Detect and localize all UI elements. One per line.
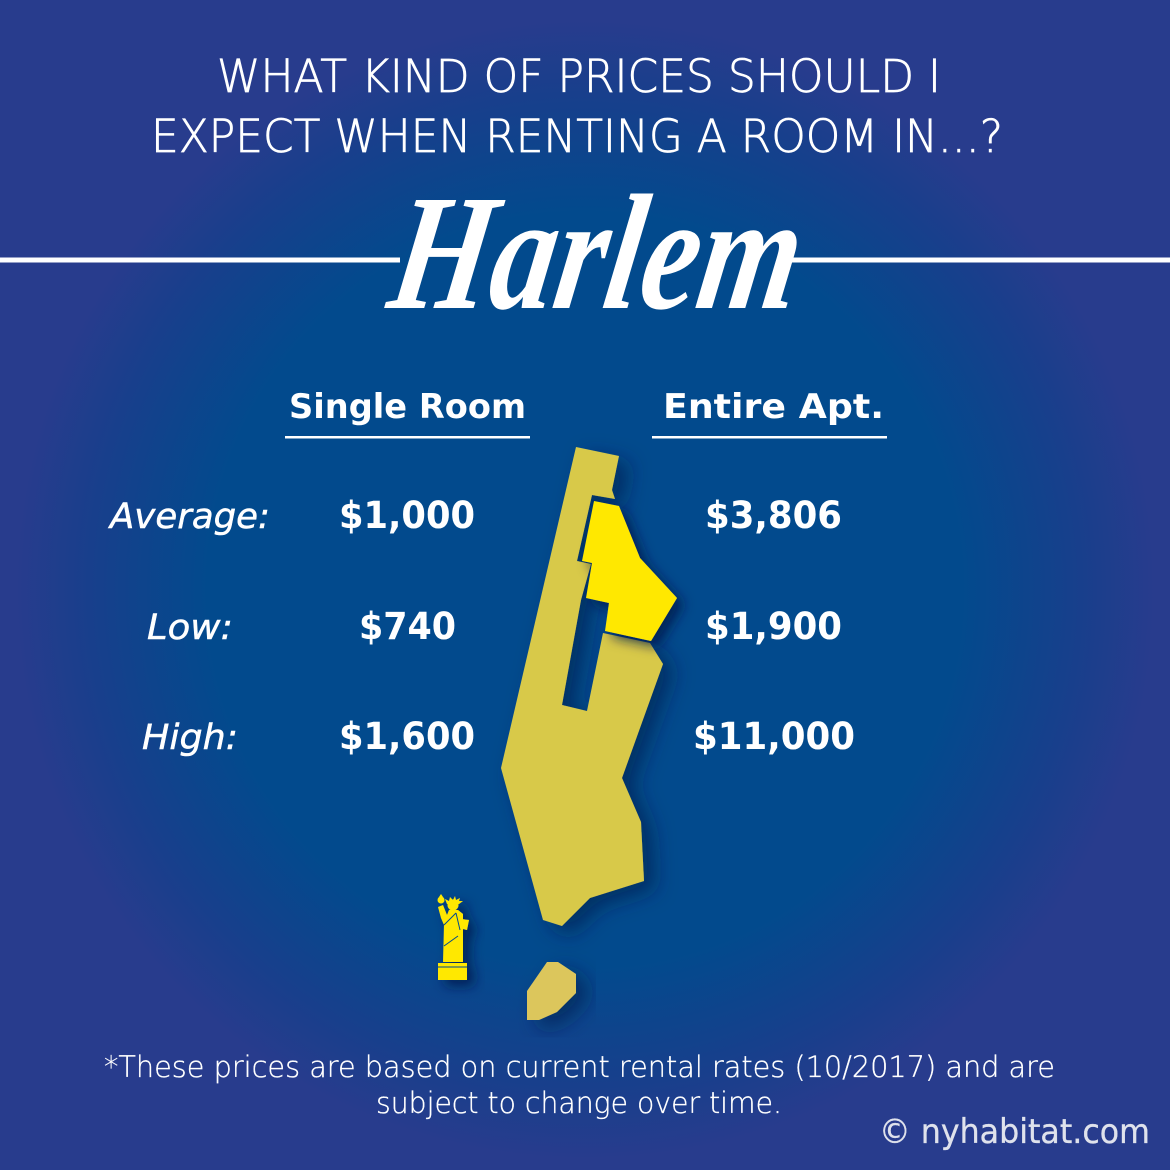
map: Manhattan island <box>501 447 663 926</box>
row labels: Low: <box>147 608 233 648</box>
neighborhood title: Harlem with rule: Harlem <box>378 161 816 344</box>
single room prices: $1,600 <box>339 715 475 758</box>
column heading: Entire Apt.: Entire Apt. <box>663 387 884 427</box>
footnote: *These prices are based on current rental rates (10/2017) and are <box>104 1050 1055 1084</box>
entire apartment prices <box>693 494 855 758</box>
entire apartment prices: $11,000 <box>693 715 855 758</box>
entire apartment prices: $1,900 <box>705 605 842 648</box>
neighborhood title: Harlem with rule <box>0 161 1170 344</box>
row labels <box>108 497 270 758</box>
map: Governors Island <box>527 962 576 1020</box>
title: question heading: EXPECT WHEN RENTING A ROOM IN...? <box>151 110 1003 163</box>
row labels: Average: <box>108 497 270 537</box>
footnote <box>104 1050 1055 1120</box>
single room prices: $740 <box>359 605 456 648</box>
entire apartment prices: $3,806 <box>705 494 842 537</box>
credit: watermark: © nyhabitat.com <box>879 1112 1150 1152</box>
single room prices <box>339 494 475 758</box>
footnote: subject to change over time. <box>376 1086 782 1120</box>
map: Harlem highlight <box>582 501 677 641</box>
icon: Statue of Liberty <box>438 894 469 980</box>
title: question heading: WHAT KIND OF PRICES SHOULD I <box>217 50 941 103</box>
single room prices: $1,000 <box>339 494 475 537</box>
title: question heading <box>151 50 1003 163</box>
row labels: High: <box>142 718 238 758</box>
column heading: Single Room: Single Room <box>289 387 526 427</box>
